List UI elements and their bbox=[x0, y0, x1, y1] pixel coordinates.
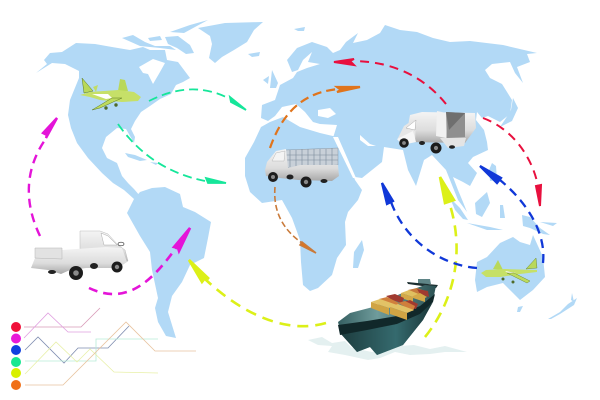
arrow: red route to Russia bbox=[334, 59, 446, 104]
Hudson Bay cut-out bbox=[139, 59, 165, 84]
hull bbox=[338, 285, 436, 355]
Eurasia bbox=[261, 25, 537, 212]
Greenland bbox=[198, 22, 263, 63]
Africa bbox=[245, 117, 362, 291]
arrow: yellow route to South America bbox=[189, 260, 326, 326]
Australia bbox=[475, 235, 545, 300]
UK and Ireland bbox=[263, 70, 278, 88]
arrow: red route to Oceania bbox=[483, 118, 541, 206]
airplane: Australia bbox=[481, 258, 537, 284]
Iceland bbox=[248, 52, 260, 57]
bridge bbox=[418, 279, 431, 284]
arrow: green lower route bbox=[118, 124, 226, 183]
arrow: green upper route bbox=[149, 89, 246, 110]
Japan bbox=[500, 98, 518, 127]
containers: rear stack bbox=[408, 288, 428, 296]
dashed route arrows bbox=[29, 59, 543, 337]
line chart legend bbox=[11, 308, 196, 390]
Svalbard bbox=[294, 27, 305, 31]
cargo ship bbox=[308, 279, 467, 360]
chart lines bbox=[24, 308, 196, 385]
truck: pickup bbox=[31, 231, 128, 280]
arrow: blue route to Arabian Sea bbox=[382, 183, 477, 268]
airplane: North America bbox=[80, 78, 141, 110]
arrow: blue route to Asia bbox=[480, 166, 543, 263]
Southeast Asia islands bbox=[450, 163, 557, 235]
arrow: magenta upper route bbox=[29, 118, 57, 236]
Tasmania bbox=[517, 306, 523, 312]
continent: North America bbox=[36, 43, 190, 199]
containers: front stack bbox=[386, 294, 404, 303]
inland seas bbox=[318, 108, 376, 178]
world map bbox=[36, 20, 577, 338]
arrow: magenta lower route bbox=[89, 228, 190, 294]
truck: cage truck bbox=[265, 148, 339, 188]
waves bbox=[308, 337, 467, 360]
truck: box truck bbox=[397, 111, 476, 154]
arctic islands bbox=[122, 20, 208, 54]
legend dots bbox=[11, 322, 21, 390]
arrow: orange route to Africa bbox=[275, 187, 316, 253]
Caribbean islands bbox=[125, 153, 158, 165]
arrow: yellow route to India bbox=[425, 177, 457, 337]
arrow: orange route to Asia bbox=[270, 87, 360, 148]
Madagascar bbox=[353, 240, 364, 268]
South America bbox=[127, 187, 211, 338]
New Zealand bbox=[548, 293, 577, 319]
